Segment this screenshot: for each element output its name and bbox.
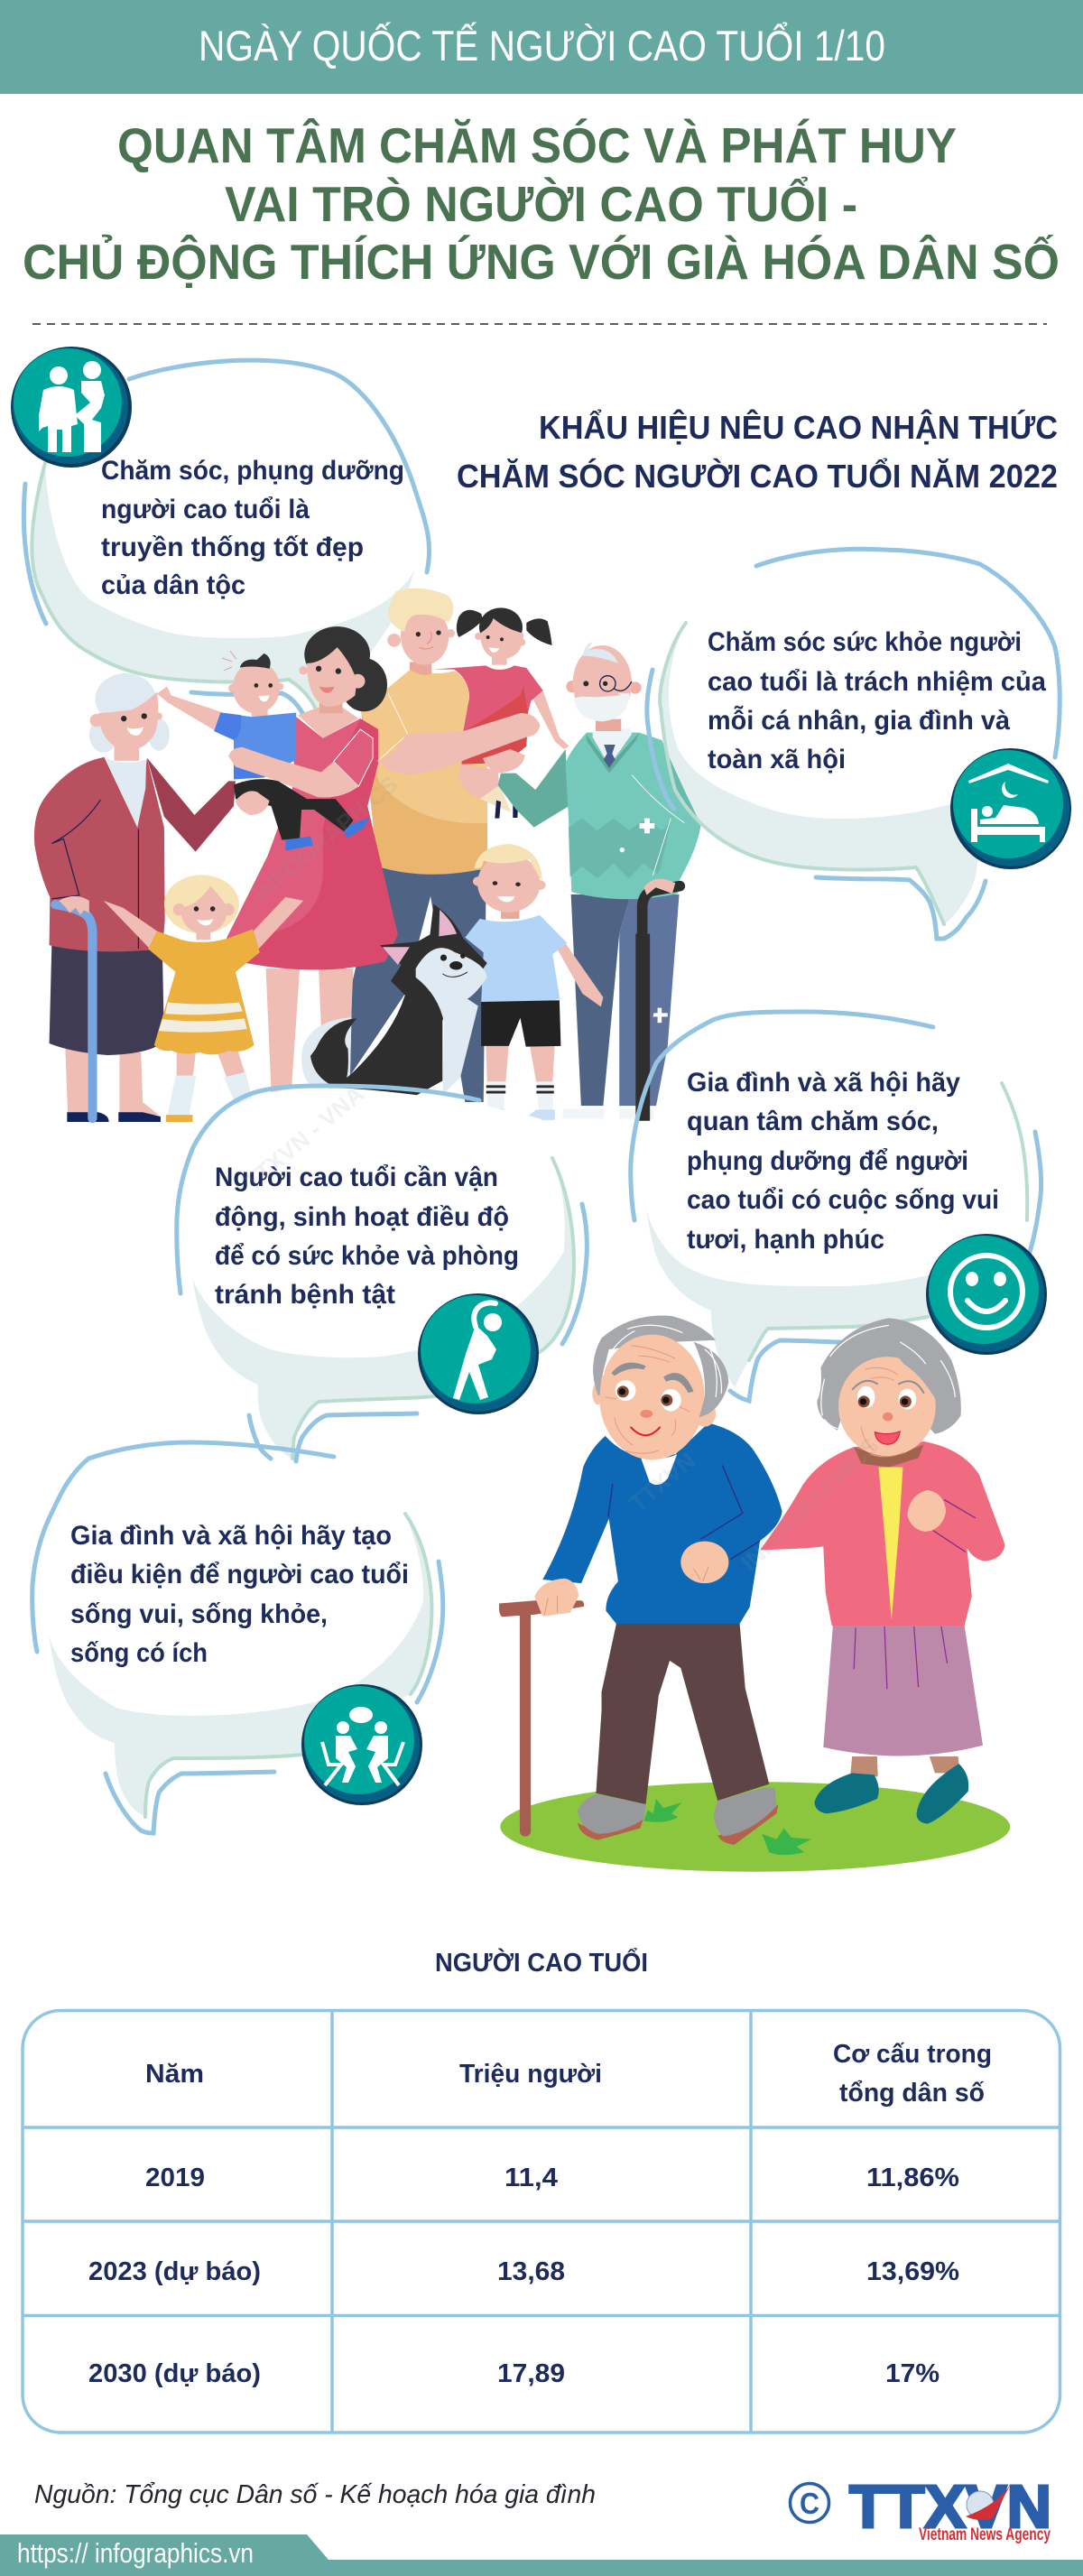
speech bubble 2: [647, 623, 986, 939]
bubble 3 text: tươi, hạnh phúc: [687, 1225, 884, 1255]
table: elderly population: 2023 (dự báo): [88, 2257, 261, 2286]
bubble 2 text: toàn xã hội: [708, 745, 846, 774]
table: elderly population: Cơ cấu trong: [833, 2040, 992, 2069]
speech bubble 3: [631, 1012, 1041, 1401]
icon: two people talking: [301, 1684, 422, 1805]
main title: QUAN TÂM CHĂM SÓC VÀ PHÁT HUY: [117, 117, 957, 173]
watermarks: TTXVN: [625, 1447, 700, 1517]
icon: stretching person: [418, 1293, 539, 1414]
table: elderly population: 17%: [885, 2359, 940, 2388]
elderly man: [534, 1316, 782, 1845]
bubble 3 text: quan tâm chăm sóc,: [687, 1107, 939, 1136]
table: elderly population: 2030 (dự báo): [88, 2359, 261, 2388]
watermarks: TTXVN - VNA: [239, 1080, 369, 1196]
footer bar with URL: [0, 2534, 1083, 2576]
mother's arm and sleeve: [228, 729, 373, 815]
elderly woman: [760, 1318, 1005, 1824]
header banner: [0, 0, 1083, 94]
bubble 2 text: mỗi cá nhân, gia đình và: [708, 705, 1011, 736]
bubble 4 text: Người cao tuổi cần vận: [215, 1163, 498, 1192]
bubble 3 text: cao tuổi có cuộc sống vui: [687, 1185, 999, 1215]
walking cane: [499, 1600, 584, 1837]
girl in yellow: [104, 875, 303, 1122]
bubble 5 text: điều kiện để người cao tuổi: [70, 1560, 409, 1589]
girl in pink: [433, 607, 569, 819]
table: elderly population: 2019: [145, 2164, 205, 2192]
main title: VAI TRÒ NGƯỜI CAO TUỔI -: [225, 176, 857, 232]
table: elderly population: 11,86%: [866, 2164, 959, 2192]
bubble 2 text: [708, 627, 1047, 774]
icon: caregiver with elder: [11, 347, 132, 468]
bubble 1 text: [101, 456, 404, 600]
grass: [500, 1782, 1010, 1872]
slogan heading: [457, 408, 1058, 495]
watermarks: INFOGRAPHICS: [736, 1432, 884, 1576]
icon: bed in house: [950, 748, 1071, 869]
table: elderly population: 13,68: [497, 2257, 565, 2286]
baby boy: [157, 651, 369, 850]
bubble 4 text: [215, 1163, 519, 1310]
bubble 2 text: Chăm sóc sức khỏe người: [708, 627, 1022, 657]
table: elderly population: 17,89: [497, 2359, 565, 2388]
bubble 5 text: sống có ích: [70, 1638, 208, 1668]
main title: [23, 117, 1060, 290]
slogan heading: KHẨU HIỆU NÊU CAO NHẬN THỨC: [539, 408, 1058, 446]
bubble 3 text: phụng dưỡng để người: [687, 1146, 968, 1176]
bubble 4 text: để có sức khỏe và phòng: [215, 1241, 519, 1271]
bubble 5 text: [70, 1521, 409, 1668]
mother: [227, 626, 398, 1109]
table: elderly population: Triệu người: [459, 2060, 602, 2089]
table: elderly population: tổng dân số: [839, 2079, 985, 2108]
speech bubble 5: [32, 1442, 443, 1833]
table: elderly population: 13,69%: [866, 2257, 959, 2286]
table: elderly population: 11,4: [504, 2164, 558, 2192]
dog: [301, 904, 487, 1098]
bubble 3 text: Gia đình và xã hội hãy: [687, 1068, 961, 1098]
logo: TTXVN: TTXVN: [849, 2473, 1051, 2541]
table: elderly population: Năm: [145, 2060, 204, 2089]
father's arm: [377, 693, 540, 774]
bubble 5 text: Gia đình và xã hội hãy tạo: [70, 1521, 392, 1551]
speech bubble 2 top outline: [756, 549, 1060, 757]
boy: [465, 844, 603, 1120]
grandmother: [34, 673, 236, 1122]
speech bubble 4: [177, 1086, 587, 1461]
speech bubble 1: [23, 360, 430, 718]
grandfather: [498, 643, 701, 1121]
bubble 1 text: Chăm sóc, phụng dưỡng: [101, 456, 404, 486]
illustration: elderly couple: [499, 1316, 1010, 1872]
watermarks: INFOGRAPHICS: [248, 770, 403, 907]
bubble 1 text: của dân tộc: [101, 570, 245, 600]
bubble 3 text: [687, 1068, 999, 1255]
bubble 5 text: sống vui, sống khỏe,: [70, 1599, 328, 1629]
footer bar with URL: https:// infographics.vn: [17, 2537, 254, 2569]
watermarks: [239, 770, 884, 1576]
bubble 1 text: truyền thống tốt đẹp: [101, 533, 364, 562]
bubble 4 text: động, sinh hoạt điều độ: [215, 1202, 509, 1232]
illustration: family group: [34, 588, 701, 1122]
table title: NGƯỜI CAO TUỔI: [435, 1947, 648, 1978]
slogan heading: CHĂM SÓC NGƯỜI CAO TUỔI NĂM 2022: [457, 456, 1058, 495]
icon: smiley face: [926, 1234, 1047, 1355]
header banner: NGÀY QUỐC TẾ NGƯỜI CAO TUỔI 1/10: [199, 22, 885, 69]
father: [350, 588, 487, 1102]
bubble 1 text: người cao tuổi là: [101, 495, 310, 524]
bubble 2 text: cao tuổi là trách nhiệm của: [708, 667, 1047, 697]
logo: TTXVN: C: [800, 2487, 819, 2520]
table: elderly population: [23, 2011, 1060, 2432]
bubble 4 text: tránh bệnh tật: [215, 1280, 395, 1310]
source note: Nguồn: Tổng cục Dân số - Kế hoạch hóa gia đình: [34, 2480, 596, 2509]
